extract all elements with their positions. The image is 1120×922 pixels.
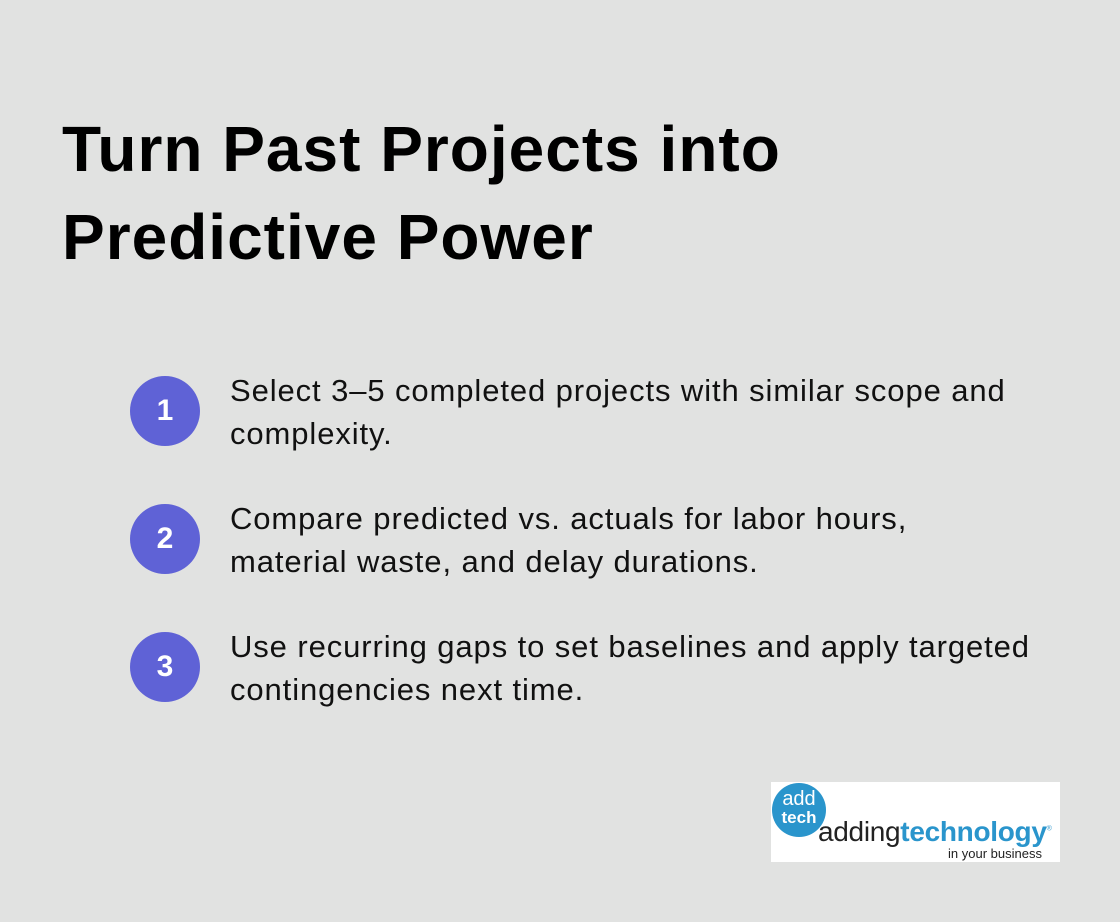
title: Predictive Power [62, 201, 594, 273]
step 1 [130, 373, 1006, 451]
logo circle: tech [782, 808, 816, 827]
badge 3 [130, 632, 200, 702]
badge 1: 1 [157, 394, 173, 427]
step 3 [130, 629, 1030, 707]
text 2: material waste, and delay durations. [230, 544, 759, 579]
logo [771, 782, 1060, 862]
text 3: contingencies next time. [230, 672, 584, 707]
text 2: Compare predicted vs. actuals for labor hours, [230, 501, 907, 536]
logo wordmark: addingtechnology® [818, 816, 1052, 847]
text 1: complexity. [230, 416, 393, 451]
badge 2: 2 [157, 522, 173, 555]
logo tagline: in your business [948, 846, 1042, 861]
text 2 [230, 501, 907, 579]
step 2 [130, 501, 907, 579]
badge 3: 3 [157, 650, 173, 683]
text 3: Use recurring gaps to set baselines and apply targeted [230, 629, 1030, 664]
text 1 [230, 373, 1006, 451]
logo circle [772, 783, 826, 837]
badge 2 [130, 504, 200, 574]
badge 1 [130, 376, 200, 446]
title: Turn Past Projects into [62, 113, 781, 185]
title [62, 113, 781, 273]
text 1: Select 3–5 completed projects with similar scope and [230, 373, 1006, 408]
text 3 [230, 629, 1030, 707]
logo circle: add [782, 788, 816, 810]
